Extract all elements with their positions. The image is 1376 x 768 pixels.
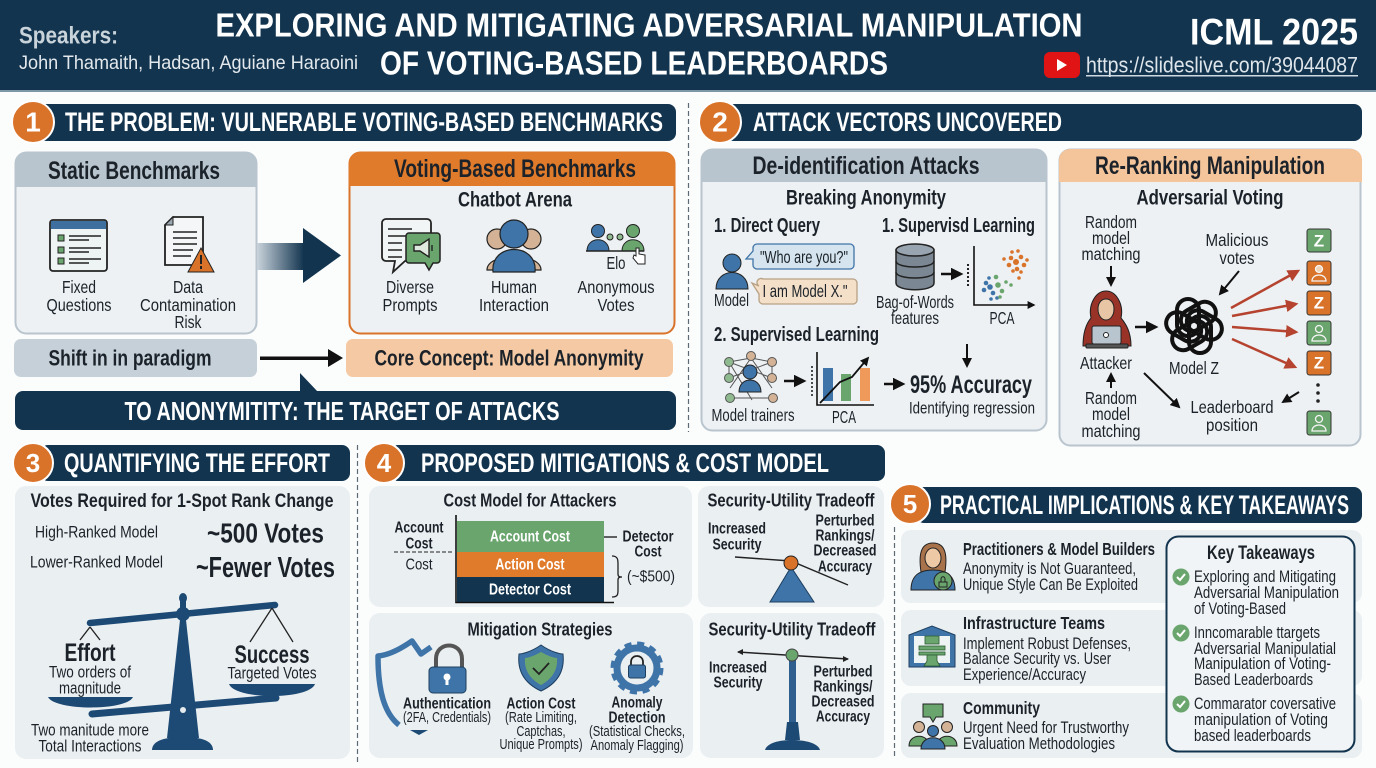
section 3 heading: QUANTIFYING THE EFFORT: [64, 448, 330, 478]
callout: target of attacks: TO ANONYMITITY: THE TARGET OF ATTACKS: [124, 396, 560, 426]
panel heading: Votes Required for 1-Spot Rank Change: [30, 490, 334, 512]
label: leaderboard position: [1190, 397, 1274, 435]
label: human interaction: [479, 277, 549, 315]
takeaway one: [1172, 568, 1339, 618]
label: malicious votes: Malicious: [1206, 230, 1269, 250]
icon: balance scale: [48, 593, 315, 750]
panel: cost model: [369, 486, 692, 607]
arrow: static to voting: [257, 228, 341, 283]
heading: practitioners: Practitioners & Model Builders: [963, 539, 1155, 559]
label: lower ranked: Lower-Ranked Model: [30, 552, 163, 572]
icon: document with warning: [165, 217, 214, 272]
icon: model person: [716, 254, 748, 289]
label: anomaly detection: [589, 694, 685, 754]
label: increased security: Security: [712, 536, 762, 554]
panel: key takeaways: Key Takeaways: [1207, 542, 1315, 564]
panel: tradeoff one: [698, 486, 884, 607]
label: fixed questions: Questions: [46, 295, 112, 315]
label: model: Model: [714, 290, 749, 310]
label: account cost: Cost: [406, 536, 433, 552]
arrow: matching up: [1110, 374, 1112, 388]
label: fixed questions: [46, 277, 112, 315]
arrow: malicious votes to model: [1220, 271, 1239, 294]
icon: diverse prompts: [382, 219, 440, 272]
label: random model matching bottom: matching: [1082, 421, 1140, 441]
label: anomaly detection: Anomaly Flagging): [590, 738, 684, 754]
icon: community: [909, 704, 957, 749]
panel: de-identification attacks: [701, 149, 1047, 430]
icon: model trainers network: [724, 352, 778, 402]
label: random model matching top: [1082, 212, 1140, 264]
label: increased security: [708, 520, 766, 554]
arrow: shift to core concept: [260, 349, 343, 367]
section 2: attack vectors: [699, 101, 1362, 446]
panel: key takeaways: [1166, 536, 1354, 752]
icon: question form: [50, 220, 107, 271]
label: account cost: Account: [394, 520, 444, 536]
scatter chart: [968, 246, 1034, 305]
label: random model matching top: Random: [1085, 212, 1137, 232]
arrow: attacker to leaderboard: [1144, 373, 1179, 407]
label: detector cost: Detector: [622, 528, 674, 546]
icon: attacker: [1083, 291, 1131, 348]
arrows: red votes: [1231, 271, 1298, 367]
text: community: Evaluation Methodologies: [963, 735, 1115, 753]
title: OF VOTING-BASED LEADERBOARDS: [380, 44, 888, 82]
label: data contamination risk: Data: [173, 277, 203, 297]
section 3 heading: [13, 443, 350, 483]
takeaway two: [1172, 624, 1336, 689]
stacked cost bar: [456, 515, 614, 602]
arrow: chart to accuracy: [884, 383, 903, 385]
speech bubble: i am model x: I am Model X.": [762, 281, 848, 301]
arrow: matching down: [1110, 266, 1112, 285]
section 1 heading: THE PROBLEM: VULNERABLE VOTING-BASED BENCHMARKS: [65, 107, 663, 137]
label: effort: Effort: [64, 639, 116, 667]
label: diverse prompts: Diverse: [386, 277, 434, 297]
takeaway one: of Voting-Based: [1194, 600, 1286, 618]
icon: practitioner: [911, 543, 955, 590]
section 1 heading: 1: [25, 106, 41, 138]
arrow: trainers to chart: [784, 380, 804, 382]
label: model trainers: Model trainers: [712, 405, 795, 425]
speaker names: John Thamaith, Hadsan, Aguiane Haraoini: [19, 52, 358, 74]
label: perturbed rankings: Decreased: [812, 694, 874, 710]
box: shift in paradigm: [14, 339, 257, 377]
section 4: mitigations and cost model: [364, 443, 885, 758]
subheading: direct query: 1. Direct Query: [714, 215, 821, 237]
text: infrastructure: [963, 635, 1131, 684]
label: anomaly detection: Anomaly: [612, 694, 663, 712]
takeaway three: Commarator coversative: [1194, 695, 1336, 713]
label: effort: [49, 639, 131, 698]
conference name: ICML 2025: [1190, 12, 1358, 52]
panel: voting-based benchmarks: [349, 152, 675, 334]
stacked cost bar: Action Cost: [496, 556, 565, 574]
label: effort: magnitude: [59, 678, 121, 698]
panel: tradeoff two: [700, 613, 884, 758]
section 2 heading: ATTACK VECTORS UNCOVERED: [753, 107, 1062, 137]
label: anonymous votes: Anonymous: [578, 277, 655, 297]
label: random model matching bottom: Random: [1085, 388, 1137, 408]
text: infrastructure: Experience/Accuracy: [963, 666, 1087, 684]
takeaway two: Manipulation of Voting-: [1194, 655, 1331, 673]
label: anomaly detection: (Statistical Checks,: [589, 724, 685, 740]
label: action cost: Action Cost: [506, 696, 576, 712]
label: perturbed rankings: Perturbed: [814, 664, 872, 680]
label: diverse prompts: [382, 277, 438, 315]
panel: static benchmarks: Static Benchmarks: [48, 157, 220, 185]
header band: [0, 0, 1376, 92]
panel: re-ranking manipulation: [1059, 149, 1362, 446]
section 5 heading: [890, 484, 1362, 524]
panel: tradeoff two: Security-Utility Tradeoff: [708, 618, 876, 640]
label: authentication: Authentication: [403, 696, 491, 712]
subheading: chatbot arena: Chatbot Arena: [458, 188, 572, 212]
text: practitioners: Anonymity is Not Guaranteed,: [963, 560, 1136, 578]
stat: accuracy: 95% Accuracy: [910, 371, 1032, 399]
heading: infrastructure: Infrastructure Teams: [963, 613, 1105, 633]
takeaway one: Exploring and Mitigating: [1194, 568, 1336, 586]
stacked cost bar: Detector Cost: [489, 582, 572, 598]
label: high ranked: High-Ranked Model: [35, 522, 158, 542]
section 1 heading: [12, 101, 676, 143]
section 5: practical implications: [890, 484, 1362, 758]
label: total interactions: Two manitude more: [31, 720, 149, 740]
panel: cost model: Cost Model for Attackers: [444, 490, 616, 510]
panel: mitigation strategies: Mitigation Strategies: [468, 618, 612, 640]
vote boxes: [1307, 229, 1331, 435]
dots: [1316, 383, 1320, 403]
stacked cost bar: Account Cost: [490, 528, 571, 546]
takeaway two: Inncomarable ttargets: [1194, 624, 1320, 642]
label: perturbed rankings: Rankings/: [814, 678, 873, 696]
panel: de-identification attacks: De-identification Attacks: [752, 152, 980, 180]
subheading: adversarial voting: Adversarial Voting: [1136, 186, 1284, 210]
icon: database: [896, 244, 934, 290]
label: perturbed rankings: [812, 664, 874, 726]
icon: infrastructure: [909, 626, 955, 667]
label: bag of words: Bag-of-Words: [876, 292, 954, 312]
label: fixed questions: Fixed: [62, 277, 96, 297]
box: core concept: [346, 339, 673, 377]
label: perturbed rankings: [814, 512, 876, 576]
vote box letters: [1314, 232, 1324, 372]
label: action cost: Unique Prompts): [500, 737, 582, 753]
arrow: votes to leaderboard: [1283, 392, 1299, 402]
label: action cost: Captchas,: [516, 724, 566, 740]
label: total interactions: [31, 720, 149, 756]
label: data contamination risk: Contamination: [140, 295, 236, 315]
icon: tilted seesaw: [735, 556, 848, 602]
arrow: down to accuracy: [966, 344, 968, 366]
label: pca bottom: PCA: [832, 407, 856, 427]
panel: votes required: [15, 486, 350, 759]
icon: large shield with lock: [378, 641, 466, 735]
label: anomaly detection: Detection: [608, 710, 666, 726]
title: EXPLORING AND MITIGATING ADVERSARIAL MANIPULATION: [216, 6, 1082, 44]
section 1: the problem: [12, 101, 676, 430]
label: attacker: Attacker: [1080, 353, 1132, 373]
label: success: Success: [234, 641, 310, 669]
panel: community: [901, 693, 1362, 758]
label: perturbed rankings: Perturbed: [816, 512, 874, 530]
label: random model matching bottom: [1082, 388, 1140, 441]
stat: 500 votes: ~500 Votes: [207, 518, 324, 548]
speech bubble: who are you: "Who are you?": [760, 247, 848, 267]
vote box letters: Z: [1314, 294, 1324, 312]
label: anonymous votes: [578, 277, 655, 315]
heading: community: Community: [963, 698, 1040, 718]
label: increased security: Increased: [708, 520, 766, 538]
label: increased security: Increased: [709, 660, 767, 676]
section 4 heading: PROPOSED MITIGATIONS & COST MODEL: [421, 448, 829, 478]
icon: human interaction: [487, 220, 541, 272]
label: account cost: Cost: [406, 556, 433, 574]
vote box letters: Z: [1314, 354, 1324, 372]
subheading: breaking anonymity: Breaking Anonymity: [786, 186, 946, 210]
speakers label: Speakers:: [19, 22, 118, 50]
panel: static benchmarks: [15, 152, 257, 334]
label: anonymous votes: Votes: [598, 295, 635, 315]
label: data contamination risk: [140, 277, 236, 332]
box: shift in paradigm: Shift in in paradigm: [48, 346, 212, 370]
label: elo: Elo: [606, 253, 626, 273]
label: authentication: [403, 696, 491, 726]
vote box letters: Z: [1314, 232, 1324, 250]
subheading: supervised learning one: 1. Supervisd Learning: [882, 215, 1035, 237]
panel: mitigation strategies: [369, 613, 693, 758]
label: malicious votes: [1206, 230, 1269, 268]
label: leaderboard position: Leaderboard: [1190, 397, 1274, 417]
label: effort: Two orders of: [49, 662, 131, 682]
label: increased security: [709, 660, 767, 692]
icon: model z knot: [1162, 298, 1226, 354]
label: perturbed rankings: Decreased: [814, 542, 876, 560]
label: action cost: [500, 696, 582, 753]
section 3 heading: 3: [26, 448, 40, 478]
label: perturbed rankings: Accuracy: [816, 708, 870, 726]
panel: practitioners: [901, 530, 1362, 603]
text: practitioners: Unique Style Can Be Exploited: [963, 576, 1138, 594]
label: model z: Model Z: [1169, 358, 1219, 378]
section 2 heading: [699, 101, 1362, 143]
label: account cost: [394, 520, 452, 574]
label: success: Targeted Votes: [228, 664, 316, 682]
section 3: quantifying the effort: [13, 443, 350, 759]
panel: tradeoff one: Security-Utility Tradeoff: [708, 490, 875, 510]
label: random model matching top: matching: [1082, 244, 1140, 264]
takeaway two: Based Leaderboards: [1194, 671, 1313, 689]
icon: balanced post: [737, 649, 849, 750]
section 2 heading: 2: [712, 106, 728, 138]
takeaway three: manipulation of Voting: [1194, 711, 1328, 729]
brace with price: [612, 556, 675, 597]
takeaway three: based leaderboards: [1194, 727, 1311, 745]
icon: anonymous votes: [586, 224, 645, 264]
text: community: Urgent Need for Trustworthy: [963, 719, 1130, 737]
label: detector cost: Cost: [634, 544, 662, 560]
takeaway three: [1172, 695, 1336, 745]
text: community: [963, 719, 1130, 753]
callout: target of attacks: [15, 373, 676, 430]
label: leaderboard position: position: [1206, 415, 1258, 435]
label: success: [228, 641, 316, 682]
section 4 heading: 4: [377, 448, 392, 478]
label: detector cost: [604, 528, 674, 560]
label: perturbed rankings: Accuracy: [818, 558, 872, 576]
label: random model matching bottom: model: [1092, 404, 1130, 424]
section 4 heading: [364, 443, 885, 483]
label: human interaction: Human: [491, 277, 537, 297]
label: data contamination risk: Risk: [174, 312, 202, 332]
stat: fewer votes: ~Fewer Votes: [196, 552, 335, 584]
arrow: database to chart: [941, 273, 961, 275]
box: core concept: Core Concept: Model Anonymity: [374, 346, 644, 370]
label: pca top: PCA: [990, 308, 1015, 328]
speech bubble: who are you: [746, 244, 854, 269]
label: human interaction: Interaction: [479, 295, 549, 315]
icon: youtube: [1044, 52, 1080, 78]
label: total interactions: Total Interactions: [38, 736, 142, 756]
text: practitioners: [963, 560, 1138, 594]
subheading: supervised learning two: 2. Supervised Learning: [714, 324, 879, 346]
arrow: attacker to model: [1135, 326, 1156, 328]
panel: infrastructure: [901, 610, 1362, 686]
label: perturbed rankings: Rankings/: [816, 528, 875, 544]
bar chart: [812, 352, 874, 405]
label: identifying regression: Identifying regression: [909, 398, 1035, 418]
label: diverse prompts: Prompts: [382, 295, 438, 315]
label: authentication: (2FA, Credentials): [403, 710, 491, 726]
text: infrastructure: Balance Security vs. User: [963, 650, 1111, 668]
takeaway one: Adversarial Manipulation: [1194, 584, 1339, 602]
title: [216, 6, 1082, 82]
section 5 heading: 5: [903, 489, 917, 519]
label: random model matching top: model: [1092, 228, 1130, 248]
text: infrastructure: Implement Robust Defenses,: [963, 635, 1131, 653]
icon: gear with lock: [613, 644, 661, 692]
speech bubble: i am model x: [752, 278, 857, 304]
takeaway two: Adversarial Manipulatial: [1194, 640, 1336, 658]
icon: green shield: [519, 645, 563, 691]
label: bag of words: features: [891, 308, 939, 328]
label: increased security: Security: [714, 674, 763, 692]
label: malicious votes: votes: [1220, 248, 1255, 268]
label: bag of words: [876, 292, 954, 328]
label: action cost: (Rate Limiting,: [505, 710, 577, 726]
panel: voting-based benchmarks: Voting-Based Benchmarks: [394, 155, 636, 183]
brace with price: (~$500): [627, 568, 675, 586]
